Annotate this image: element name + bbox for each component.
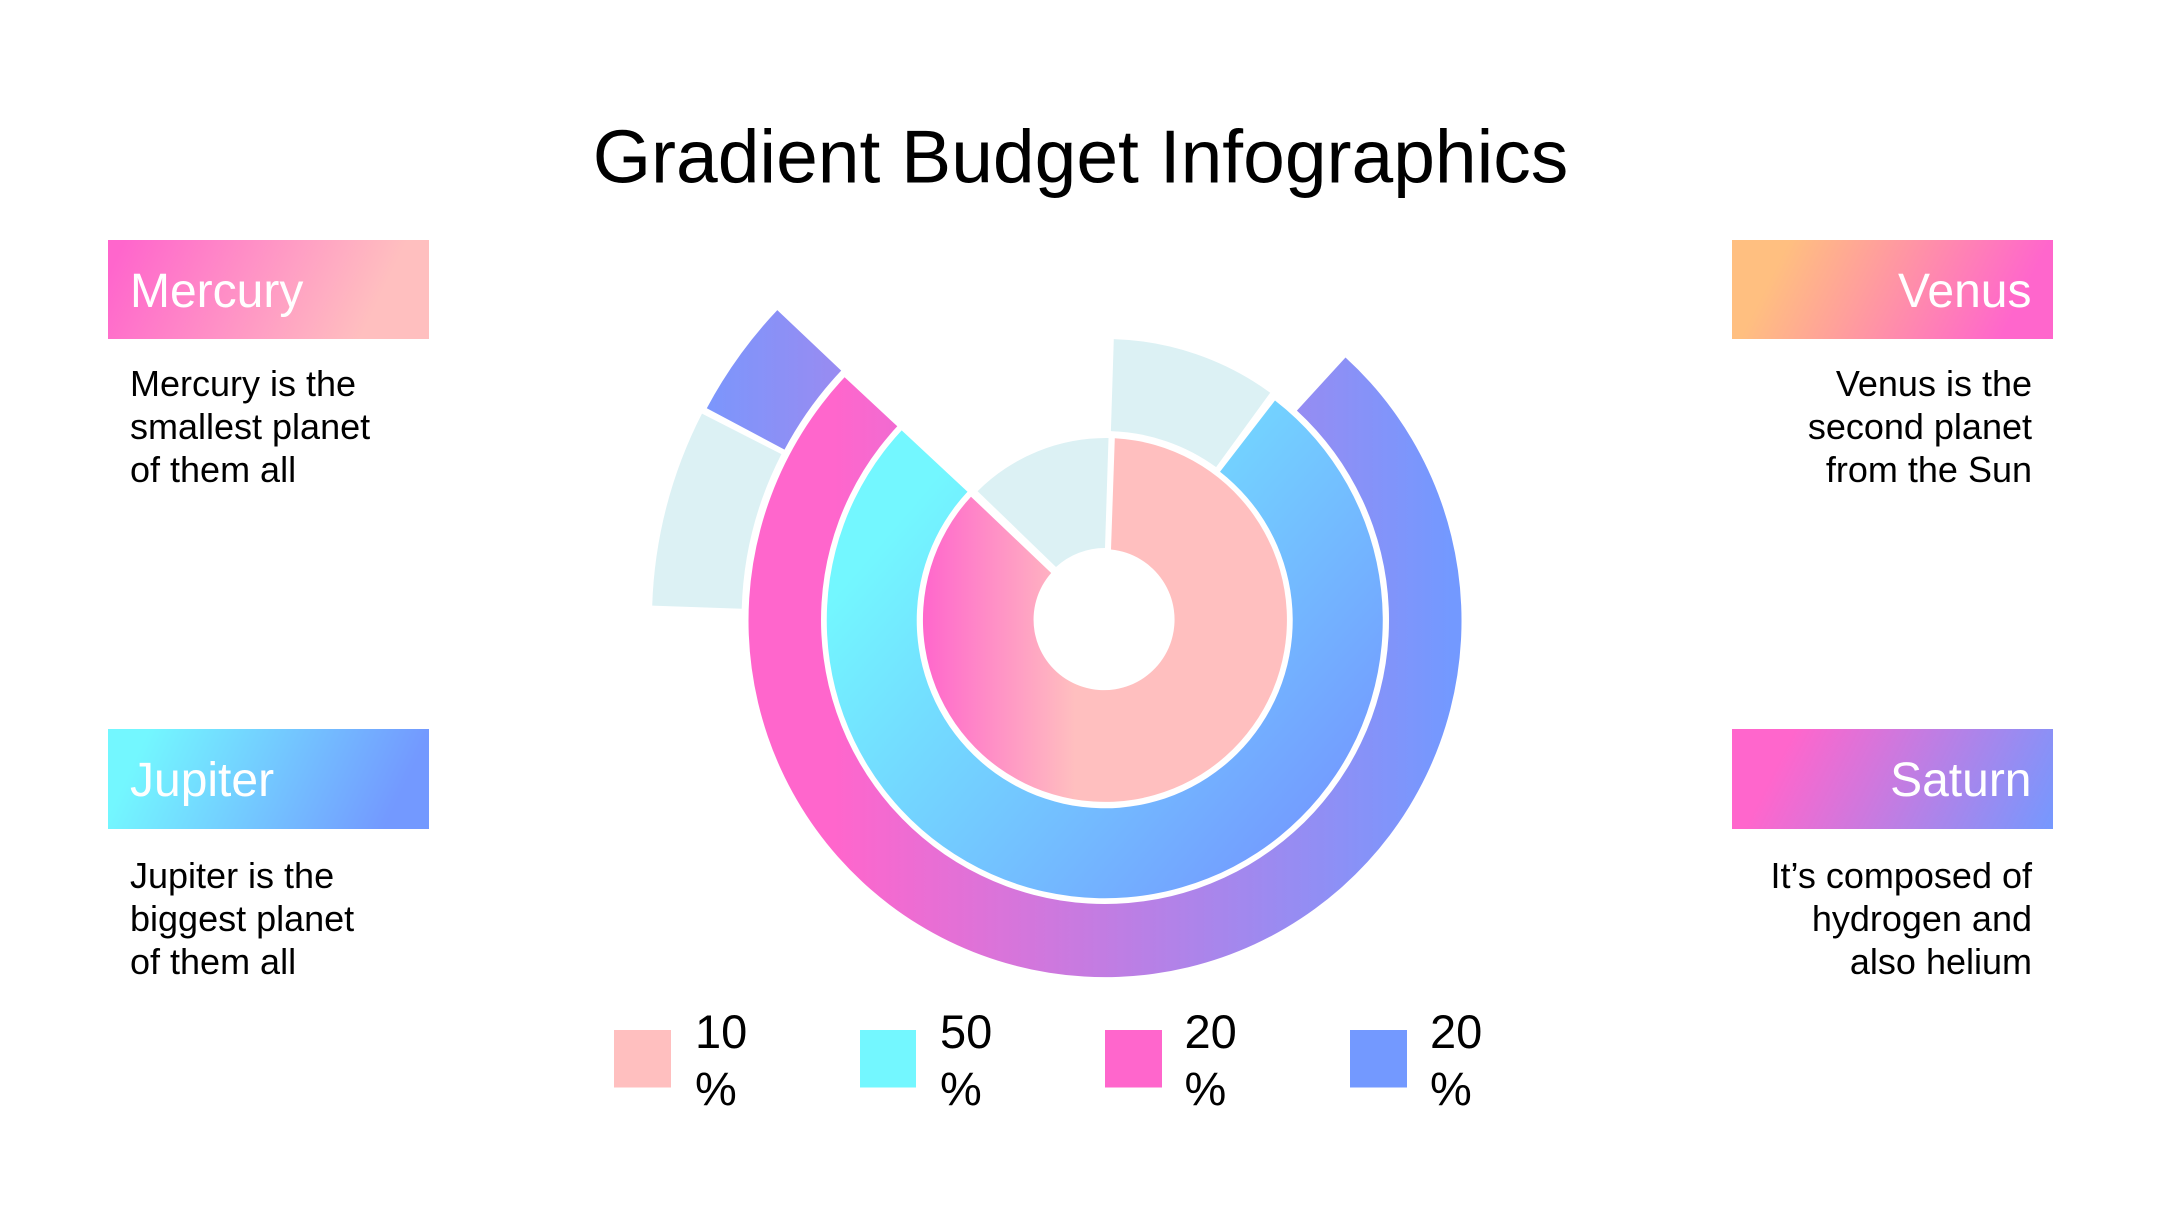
panel: Mercury	[108, 240, 429, 490]
inner ring remainder: pale	[978, 438, 1108, 567]
Saturn description: hydrogen and	[1812, 898, 2032, 939]
Venus description: from the Sun	[1826, 449, 2032, 490]
Mercury header	[108, 240, 429, 339]
legend item: 20% blue	[1350, 1005, 1482, 1115]
Mercury description: smallest planet	[130, 406, 370, 447]
middle ring remainder: pale	[1111, 339, 1270, 467]
legend item: 10%	[614, 1005, 747, 1115]
Saturn description: It’s composed of	[1771, 855, 2033, 896]
legend item: 10%: %	[695, 1062, 737, 1115]
Mercury description: Mercury is the	[130, 363, 356, 404]
Jupiter header: Jupiter	[130, 754, 274, 807]
Venus description: second planet	[1808, 406, 2032, 447]
title: Gradient Budget Infographics	[593, 114, 1568, 198]
outer ring remainder: pale	[652, 414, 781, 609]
Saturn description: also helium	[1850, 941, 2032, 982]
legend item: 20% blue: %	[1430, 1062, 1472, 1115]
Venus header	[1732, 240, 2053, 339]
legend item: 50%	[860, 1005, 992, 1115]
Saturn header	[1732, 729, 2053, 829]
legend item: 50%: 50	[940, 1005, 992, 1058]
legend item: 20% pink: 20	[1184, 1005, 1237, 1058]
outer ring segment: pink to blue	[749, 358, 1462, 977]
Jupiter header	[108, 729, 429, 829]
inner ring segment: pink to peach	[923, 438, 1287, 802]
panel: Saturn	[1732, 729, 2053, 982]
Venus description: Venus is the	[1836, 363, 2032, 404]
Jupiter description: Jupiter is the	[130, 855, 334, 896]
legend item: 20% pink: %	[1184, 1062, 1226, 1115]
radial budget chart	[652, 310, 1462, 977]
Mercury description: of them all	[130, 449, 296, 490]
legend item: 20% blue: 20	[1430, 1005, 1482, 1058]
Jupiter description: of them all	[130, 941, 296, 982]
legend item: 50%: %	[940, 1062, 982, 1115]
Saturn header: Saturn	[1890, 754, 2032, 807]
legend item: 20% pink	[1105, 1005, 1237, 1115]
legend item: 10%: 10	[695, 1005, 747, 1058]
outer ring wedge: blue	[707, 310, 841, 450]
Mercury header: Mercury	[130, 265, 303, 318]
legend	[614, 1005, 1482, 1115]
Jupiter description: biggest planet	[130, 898, 354, 939]
panel: Venus	[1732, 240, 2053, 490]
Venus header: Venus	[1898, 265, 2032, 318]
panel: Jupiter	[108, 729, 429, 982]
middle ring segment: cyan to blue	[827, 400, 1383, 898]
